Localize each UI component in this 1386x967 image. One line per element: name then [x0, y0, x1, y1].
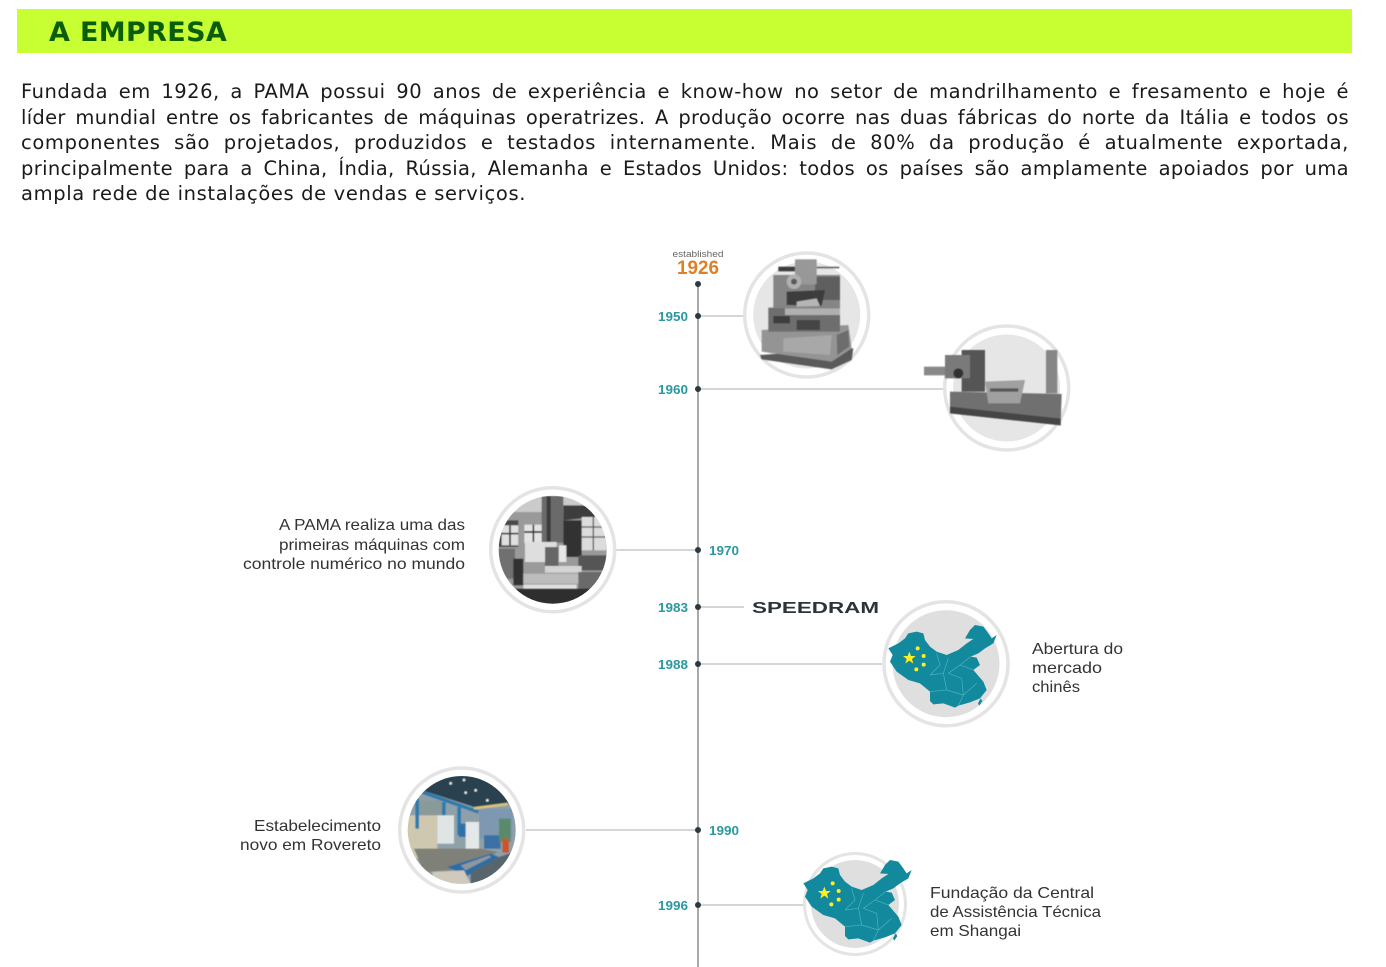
timeline axis	[695, 281, 701, 967]
intro paragraph: componentes são projetados, produzidos e testados internamente. Mais de 80% da produção é atualmente exportada,	[21, 131, 1349, 154]
text: Chinese market	[1032, 641, 1123, 696]
intro paragraph: líder mundial entre os fabricantes de máquinas operatrizes. A produção ocorre nas duas fábricas do norte da Itália e todos os	[21, 106, 1349, 128]
text: numerical control	[243, 517, 465, 573]
intro paragraph: ampla rede de instalações de vendas e serviços.	[21, 182, 526, 205]
event 1988	[658, 602, 1008, 726]
text: Shanghai service center: de Assistência Técnica	[930, 904, 1101, 921]
event 1950	[658, 253, 869, 377]
intro paragraph: principalmente para a China, Índia, Rússia, Alemanha e Estados Unidos: todos os países são amplamente apoiados por uma	[21, 156, 1349, 180]
event 1950: 1950	[658, 309, 688, 324]
text: Chinese market: mercado	[1032, 660, 1102, 677]
text: Chinese market: Abertura do	[1032, 641, 1123, 658]
text: Shanghai service center	[930, 885, 1101, 940]
text: Shanghai service center: em Shangai	[930, 923, 1021, 940]
text: numerical control: A PAMA realiza uma das	[279, 517, 465, 534]
photo: Rovereto plant	[408, 776, 516, 884]
icon: 1960 machine	[924, 350, 1062, 425]
established 1926 label: established	[672, 249, 724, 260]
event 1983: 1983	[658, 600, 688, 615]
event 1996: 1996	[658, 898, 688, 913]
event 1990	[400, 768, 739, 892]
text: Rovereto: Estabelecimento	[254, 818, 381, 835]
event 1983	[658, 600, 879, 617]
event 1990: 1990	[709, 823, 739, 838]
event 1996	[658, 854, 912, 954]
established 1926 label: 1926	[677, 258, 719, 279]
event 1988: 1988	[658, 657, 688, 672]
event 1960	[658, 326, 1069, 450]
intro paragraph	[21, 80, 1349, 205]
text: Chinese market: chinês	[1032, 679, 1080, 696]
text: Rovereto: novo em Rovereto	[240, 837, 381, 854]
icon: China map	[888, 625, 997, 708]
icon: China map	[803, 860, 912, 943]
title bar: A EMPRESA	[17, 9, 1352, 53]
event 1970	[491, 488, 739, 612]
logo: Speedram: SPEEDRAM	[752, 600, 879, 617]
timeline chart	[241, 250, 1122, 967]
text: numerical control: controle numérico no mundo	[243, 556, 465, 573]
icon: 1950 machine	[760, 259, 853, 369]
title bar: A EMPRESA: A EMPRESA	[49, 17, 227, 48]
event 1970: 1970	[709, 543, 739, 558]
established 1926 label	[672, 249, 724, 279]
text: Rovereto	[240, 818, 381, 854]
text: numerical control: primeiras máquinas com	[279, 537, 465, 554]
photo: 1970 workshop	[498, 496, 607, 604]
event 1960: 1960	[658, 382, 688, 397]
text: Shanghai service center: Fundação da Central	[930, 885, 1094, 902]
intro paragraph: Fundada em 1926, a PAMA possui 90 anos de experiência e know-how no setor de mandrilhamento e fresamento e hoje é	[21, 80, 1349, 103]
